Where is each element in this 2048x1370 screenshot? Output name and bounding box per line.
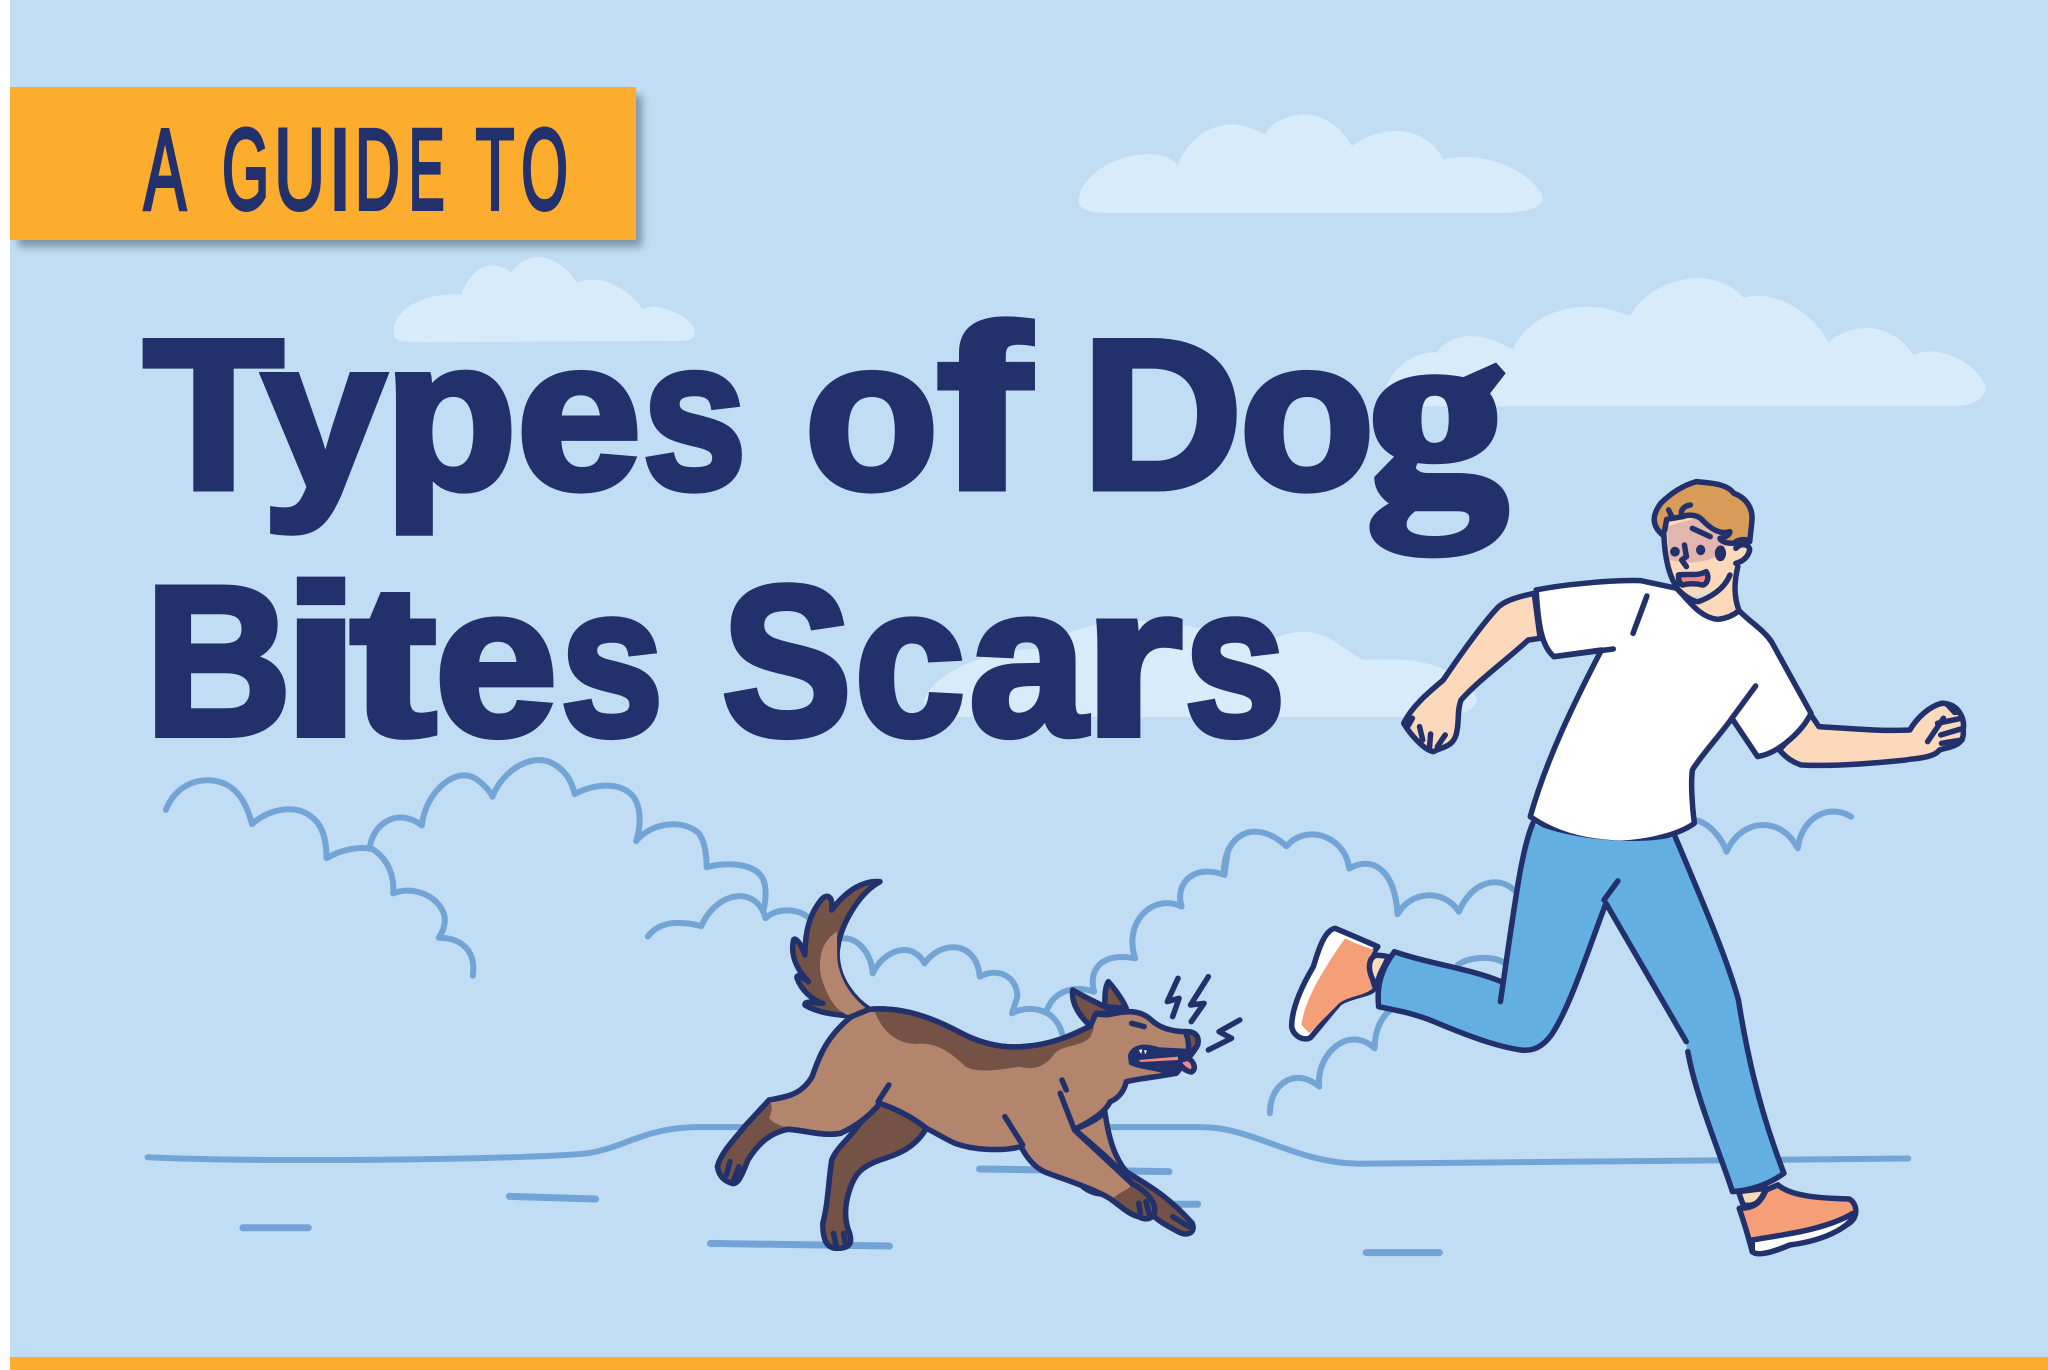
cloud: behind title bbox=[924, 621, 1477, 717]
back shoe bbox=[1292, 928, 1378, 1039]
far front leg bbox=[1080, 1172, 1193, 1234]
bottom orange bar bbox=[10, 1357, 2048, 1370]
title: o bbox=[804, 296, 938, 534]
banner: A GUIDE TO: I bbox=[328, 106, 352, 234]
neck bbox=[1690, 567, 1739, 619]
jeans bbox=[1378, 823, 1784, 1192]
left arm bbox=[1404, 593, 1540, 752]
title: s bbox=[642, 296, 746, 534]
tail bbox=[793, 881, 880, 1016]
head bbox=[1654, 482, 1752, 611]
title: D bbox=[1082, 296, 1242, 534]
bark marks bbox=[1167, 977, 1240, 1050]
title: i bbox=[282, 542, 361, 780]
title: t bbox=[350, 542, 436, 780]
banner: A GUIDE TO: T bbox=[476, 106, 514, 234]
dog illustration bbox=[717, 881, 1240, 1248]
title: g bbox=[1367, 273, 1507, 554]
banner: A GUIDE TO: A bbox=[144, 106, 186, 234]
title bbox=[144, 273, 1507, 780]
title: s bbox=[1185, 542, 1285, 780]
banner: A GUIDE TO: U bbox=[274, 106, 325, 234]
title: p bbox=[384, 296, 517, 534]
paws bbox=[719, 1102, 786, 1183]
background bushes and ground lines bbox=[148, 760, 1908, 1253]
cloud: right bbox=[1384, 278, 1986, 406]
right arm bbox=[1779, 703, 1964, 765]
body bbox=[717, 1009, 1198, 1219]
cloud: top centre bbox=[1079, 114, 1543, 213]
banner: A GUIDE TO bbox=[10, 87, 642, 247]
title: B bbox=[145, 542, 292, 780]
title: s bbox=[560, 542, 663, 780]
ears bbox=[1072, 982, 1126, 1026]
banner: A GUIDE TO: E bbox=[409, 106, 445, 234]
cloud: upper left bbox=[393, 257, 695, 342]
title: o bbox=[1240, 296, 1374, 534]
banner: A GUIDE TO: G bbox=[222, 106, 269, 234]
dog outlines bbox=[717, 1009, 1189, 1247]
front shoe bbox=[1739, 1185, 1856, 1254]
title: a bbox=[969, 542, 1088, 780]
far hind leg bbox=[823, 1103, 926, 1248]
clouds bbox=[393, 114, 1986, 717]
running man legs bbox=[1292, 823, 1856, 1254]
saddle marking bbox=[875, 1011, 1094, 1070]
title: r bbox=[1084, 542, 1182, 780]
title: e bbox=[516, 296, 642, 534]
title: T bbox=[144, 296, 283, 534]
banner: A GUIDE TO: D bbox=[355, 106, 400, 234]
bush lines behind dog bbox=[844, 850, 1228, 1033]
dog mouth and nose bbox=[1131, 1047, 1189, 1073]
shirt bbox=[1530, 581, 1811, 843]
title: e bbox=[435, 542, 557, 780]
running man upper body bbox=[1404, 482, 1964, 843]
bush lines behind man bbox=[1270, 812, 1851, 1113]
title: c bbox=[854, 542, 965, 780]
title: S bbox=[722, 542, 852, 780]
title: f bbox=[937, 279, 1031, 538]
banner: A GUIDE TO: O bbox=[521, 106, 568, 234]
title: y bbox=[262, 296, 386, 534]
